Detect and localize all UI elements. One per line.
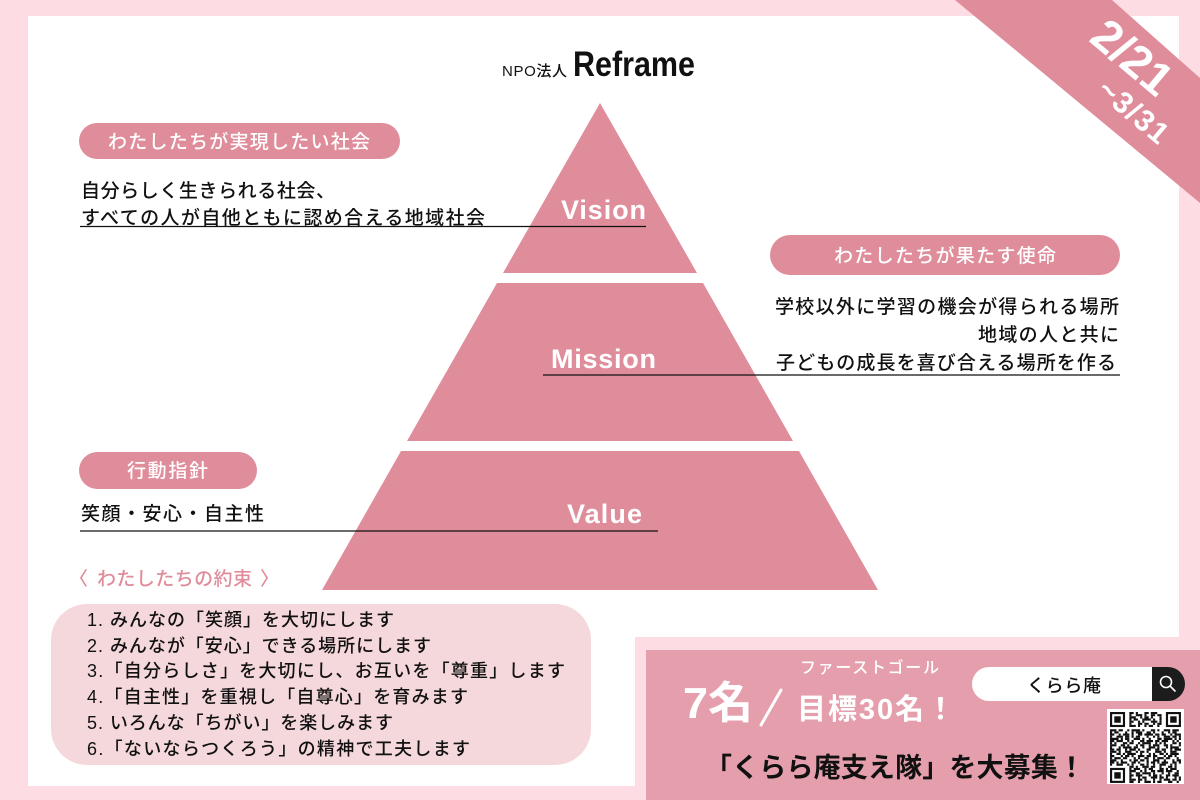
logo: Reframe — [573, 45, 695, 84]
vision rule — [80, 226, 646, 228]
QR code — [1107, 709, 1184, 784]
vision text: 自分らしく生きられる社会、 — [81, 180, 335, 202]
promise heading: 〉 — [260, 568, 279, 590]
pill heading: mission — [770, 235, 1120, 275]
mission text — [775, 296, 1119, 374]
promise list: 3.「自分らしさ」を大切にし、お互いを「尊重」します — [87, 661, 565, 681]
pill heading: vision: わたしたちが実現したい社会 — [108, 131, 370, 153]
mission text: 学校以外に学習の機会が得られる場所 — [775, 296, 1119, 318]
promise list: 1. みんなの「笑顔」を大切にします — [87, 610, 394, 630]
value label: Value — [567, 499, 642, 529]
icon: magnifier — [1160, 676, 1175, 691]
recruit headline: 「くらら庵支え隊」を大募集！ — [705, 753, 1085, 783]
promise list: 5. いろんな「ちがい」を楽しみます — [87, 712, 393, 733]
vision section — [79, 123, 646, 229]
pyramid chart — [322, 103, 878, 590]
logo — [502, 45, 695, 84]
promise panel — [51, 604, 591, 765]
value text: 笑顔・安心・自主性 — [81, 503, 264, 525]
logo: NPO法人 — [502, 63, 567, 80]
promise heading: わたしたちの約束 — [97, 568, 252, 590]
pill heading: value — [79, 452, 257, 489]
goal count: 目標30名！ — [797, 693, 955, 726]
promise list — [87, 610, 565, 759]
search bar: くらら庵 — [1027, 676, 1101, 696]
pyramid tier: value — [322, 451, 878, 590]
value rule — [80, 530, 658, 532]
promise list: 2. みんなが「安心」できる場所にします — [87, 635, 431, 656]
mission label: Mission — [551, 344, 656, 374]
promise heading: 〈 — [69, 568, 88, 590]
vision text — [81, 180, 485, 229]
pill heading: value: 行動指針 — [127, 460, 208, 482]
start date: 2/21 — [1081, 8, 1184, 106]
slash — [761, 690, 781, 725]
current count: 7名 — [683, 679, 753, 728]
vision text: すべての人が自他ともに認め合える地域社会 — [81, 207, 485, 229]
pill heading: vision — [79, 123, 400, 159]
pyramid tier: vision — [503, 103, 697, 273]
first goal label: ファーストゴール — [800, 658, 939, 677]
campaign panel — [635, 637, 1200, 800]
date banner — [955, 0, 1200, 203]
end date: ~3/31 — [1091, 73, 1175, 151]
mission rule — [543, 374, 1120, 376]
promise list: 4.「自主性」を重視し「自尊心」を育みます — [87, 687, 468, 707]
mission text: 地域の人と共に — [978, 324, 1119, 346]
pill heading: mission: わたしたちが果たす使命 — [834, 245, 1056, 267]
mission text: 子どもの成長を喜び合える場所を作る — [776, 352, 1116, 374]
promise list: 6.「ないならつくろう」の精神で工夫します — [87, 739, 470, 759]
vision label: Vision — [561, 195, 646, 225]
value section — [79, 452, 658, 531]
mission section — [543, 235, 1120, 375]
pyramid tier: mission — [407, 283, 793, 441]
search bar — [972, 667, 1185, 701]
